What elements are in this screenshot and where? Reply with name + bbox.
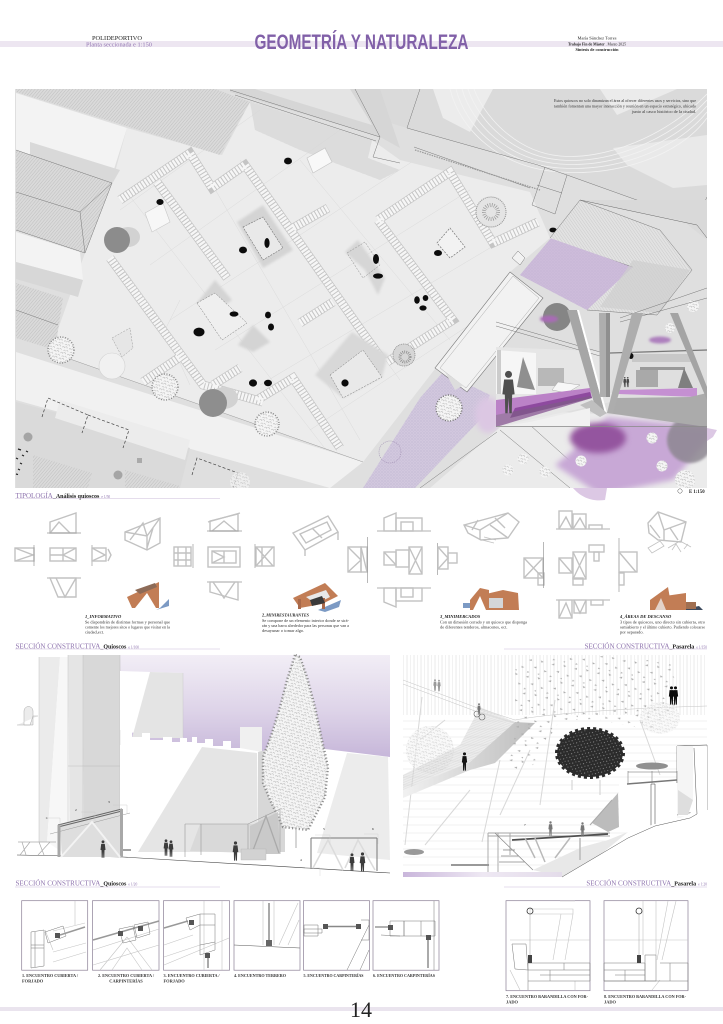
detail 6	[373, 901, 439, 970]
text of kiosk 3: 3_MINIMERCADOS	[439, 614, 481, 619]
detail 8 caption	[604, 994, 687, 1004]
white rectangular volume	[435, 251, 543, 392]
header band	[0, 41, 723, 47]
background frame lines	[403, 655, 707, 715]
typology 1: informativo	[15, 513, 170, 636]
section drawing: kiosks with tower and tree	[17, 655, 390, 880]
detail 7 caption	[506, 994, 589, 1004]
bushes at left	[406, 726, 454, 774]
kiosk 1 section: 2	[75, 808, 77, 812]
text of kiosk 2: rán y una barra alrededor para las personas que van a	[262, 623, 349, 628]
right hatched roof	[550, 200, 707, 315]
right retaining wall and terrain	[533, 745, 707, 880]
heading: sección quioscos 1/20: SECCIÓN CONSTRUCTIVA_Quioscos e 1/20	[16, 880, 137, 888]
heading: sección pasarela 1/100: SECCIÓN CONSTRUCTIVA_Pasarela e 1/150	[585, 642, 707, 650]
kiosk 3 section: 6	[372, 827, 374, 831]
kiosk 3 section: 4	[300, 858, 302, 862]
small chapel outline	[17, 706, 38, 725]
text of kiosk 2: Se compone de un elemento interior donde se sirá-	[262, 618, 350, 623]
typology 3: minimercados	[348, 513, 527, 630]
heading: sección quioscos 1/100: SECCIÓN CONSTRUCTIVA_Quioscos e 1/100	[16, 642, 139, 650]
grass and base band	[403, 849, 562, 877]
detail 3 caption: 3. ENCUENTRO CUBIERTA /	[164, 973, 220, 978]
text of kiosk 3	[439, 614, 527, 630]
detail 4	[234, 901, 300, 970]
text of kiosk 4: 4_ÁREAS DE DESCANSO	[619, 614, 672, 619]
purple gardens	[363, 237, 633, 488]
picnic table	[18, 842, 56, 855]
kiosk 1 section: 1	[46, 816, 48, 820]
plan note: también fomentan una mayor interacción y reunión en un espacio estratégico, ubicado	[554, 104, 697, 110]
detail 4 caption: 4. ENCUENTRO TERRERO	[234, 973, 287, 978]
text of kiosk 2: 2_MINIRESTAURANTES	[261, 612, 309, 618]
text of kiosk 1: Se dispondrán de distintas formas y personal que	[85, 620, 170, 624]
lower right garden and washes	[420, 412, 707, 488]
top left hatched roof	[16, 89, 250, 184]
drawings of kiosk 4	[524, 511, 691, 618]
text of kiosk 2	[261, 612, 350, 633]
header right: author and course: María Sánchez Torres	[578, 36, 617, 40]
trees on the plan	[48, 197, 506, 492]
sky	[120, 655, 390, 758]
detail 3 caption: FORJADO	[164, 978, 185, 984]
people in the section	[100, 839, 365, 872]
header right: author and course: Trabajo Fin de Máster . Marzo 2025	[568, 42, 627, 46]
left hatched roof	[16, 150, 112, 350]
perspective inset	[496, 288, 707, 427]
header left: project and drawing name: POLIDEPORTIVO	[92, 36, 143, 42]
render of kiosk 4	[650, 587, 703, 610]
kiosk 1 section	[45, 800, 131, 857]
bridge with stair	[488, 800, 612, 873]
detail 3 caption	[164, 973, 220, 984]
detail 7 caption: 7. ENCUENTRO BARANDILLA CON FOR-	[506, 994, 589, 999]
typology 4: áreas de descanso	[524, 511, 706, 634]
kiosk plans with shadows	[112, 148, 465, 398]
ramp	[403, 722, 535, 798]
text of kiosk 3: Con un dimesión cerrado y un quiosco que disponga	[440, 620, 527, 624]
site plan with perspective inset	[15, 89, 717, 500]
detail 8 caption: 8. ENCUENTRO BARANDILLA CON FOR-	[604, 994, 687, 999]
heading: tipología: TIPOLOGÍA_Análisis quioscos e 1/50	[16, 492, 110, 500]
scattered foliage	[505, 656, 680, 770]
footer band	[0, 1007, 723, 1011]
ground line	[17, 855, 390, 873]
title: GEOMETRÍA Y NATURALEZA	[254, 29, 468, 54]
detail 7	[506, 901, 590, 991]
detail 5 caption: 5. ENCUENTRO CARPINTERÍAS	[304, 973, 364, 978]
text of kiosk 1	[85, 614, 170, 636]
detail 1 caption: 1. ENCUENTRO CUBIERTA /	[22, 973, 79, 978]
header right: author and course: Síntesis de construcción	[576, 47, 619, 52]
plaza surface	[50, 102, 550, 462]
detail 3	[164, 901, 230, 970]
page number: 14	[350, 997, 372, 1022]
bottom left streets and buildings	[16, 352, 363, 488]
plaza grid lines	[120, 116, 490, 448]
text of kiosk 4: por separado.	[620, 630, 644, 634]
text of kiosk 1: comente los mejores sitos o lugares que visitar en la	[85, 624, 170, 630]
kiosk 3 section	[300, 827, 378, 876]
detail 5	[304, 901, 370, 970]
render of kiosk 3	[463, 588, 519, 610]
kiosk 1 section: 3	[108, 800, 110, 804]
detail 1	[22, 901, 88, 970]
road and circular arcs at top right	[433, 89, 707, 188]
kiosk 3 section: 5	[323, 827, 325, 831]
top building edges	[230, 89, 707, 214]
header left: project and drawing name: Planta seccionada e 1:150	[86, 42, 152, 48]
detail 1 caption: FORJADO	[22, 978, 44, 984]
dark tree	[557, 729, 623, 795]
plan note	[554, 98, 697, 114]
kiosk 2 section	[185, 809, 280, 860]
detail 2 caption: 2. ENCUENTRO CUBIERTA /	[98, 973, 155, 978]
drawings of kiosk 1	[15, 513, 160, 597]
people on the footbridge	[433, 679, 678, 771]
section drawing: footbridge	[403, 655, 707, 880]
text of kiosk 1: ciudad,ect.	[85, 630, 104, 636]
drawings of kiosk 3	[348, 513, 519, 607]
plan scale	[678, 489, 705, 495]
paving strips	[110, 153, 538, 448]
text of kiosk 4: 3 tipos de quioscos, uno directo sin cubierta, otro	[620, 620, 706, 626]
render of kiosk 2	[293, 583, 341, 612]
text of kiosk 4	[619, 614, 706, 634]
text of kiosk 1: 1_INFORMATIVO	[85, 614, 122, 619]
detail 6 caption: 6. ENCUENTRO CARPINTERÍAS	[373, 973, 436, 978]
people seen from above	[156, 158, 557, 387]
detail 2 caption: CARPINTERÍAS	[109, 978, 143, 984]
detail 8 caption: JADO	[604, 1000, 617, 1004]
detail 7 caption: JADO	[506, 1000, 519, 1004]
text of kiosk 4: semiabierto y el último cubierto. Pudiendo colocarse	[620, 624, 705, 630]
detail 2	[92, 901, 159, 970]
text of kiosk 3: de diferentes tenderos, almacenes, ect.	[440, 624, 507, 630]
plan note: junto al casco histórico de la ciudad.	[631, 109, 696, 114]
typology 2: minirestaurantes	[174, 513, 350, 633]
detail 2 caption	[98, 973, 155, 984]
header right: author and course	[568, 36, 627, 52]
render of kiosk 1	[127, 582, 169, 610]
detail 8	[604, 901, 688, 991]
detail 1 caption	[22, 973, 79, 984]
text of kiosk 2: desayunar o tomar algo.	[262, 628, 304, 633]
heading: sección pasarela 1/20: SECCIÓN CONSTRUCTIVA_Pasarela e 1:20	[586, 880, 707, 888]
cypress tree	[263, 655, 328, 848]
tower and castle walls	[39, 655, 390, 880]
header left: project and drawing name	[86, 36, 152, 48]
plan scale: E 1:150	[689, 490, 705, 495]
purple wash bleeding past the plan	[573, 428, 717, 500]
bridge with stair: 7	[524, 823, 526, 827]
drawings of kiosk 2	[174, 513, 338, 600]
upper ramp underside and diagonal struts	[405, 697, 660, 845]
plan note: Estos quioscos no solo dinamizan el área al ofrecer diferentes usos y servicios, sino que	[554, 98, 696, 104]
